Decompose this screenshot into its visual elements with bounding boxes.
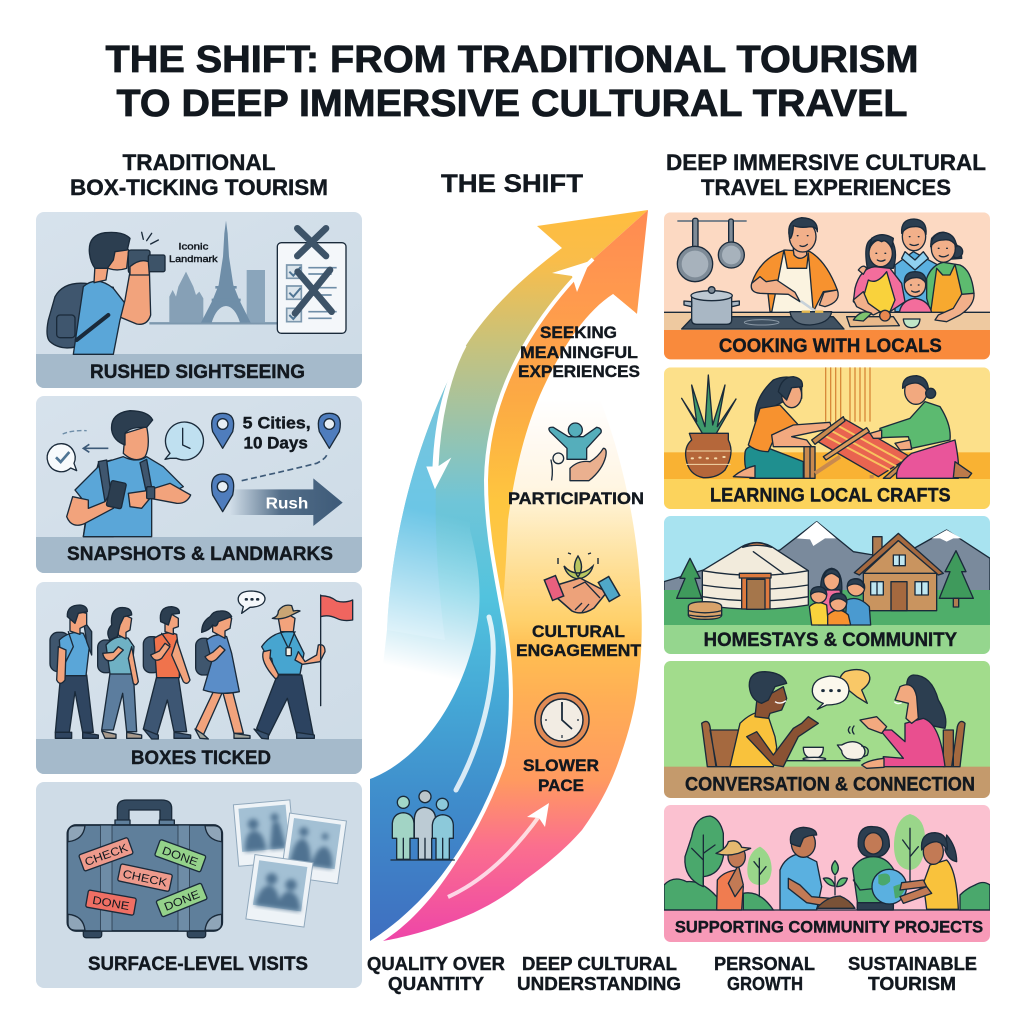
title: THE SHIFT: FROM TRADITIONAL TOURISM [106,39,918,81]
icon: clock [535,693,589,747]
arrow: inner white [456,617,493,790]
rush arrow: Rush [266,495,308,512]
family [809,568,871,625]
label: seeking: SEEKING [540,323,617,342]
label: sustainable tourism: SUSTAINABLE [848,954,977,974]
sticker: check: CHECK [121,868,168,890]
caption: CONVERSATION & CONNECTION [685,775,975,796]
sticker: check: CHECK [83,842,130,869]
ribbon: orange to pink [383,210,648,941]
location pins [212,413,340,512]
sticker: check [117,864,173,892]
icon: community group [391,791,454,860]
tourist checking watch [67,411,191,537]
label: seeking [518,323,640,381]
man planting [780,827,855,910]
stove and pot [682,287,844,329]
landmark label [169,241,218,264]
label: sustainable tourism [848,954,977,994]
man talking [730,672,818,767]
heading: deep immersive [666,150,986,200]
label: deep cultural understanding: DEEP CULTURAL [522,954,677,974]
sticker: done [86,890,136,915]
dashed route [242,453,327,481]
itinerary label: 10 Days [243,433,308,452]
label: seeking: EXPERIENCES [518,362,640,381]
cutting board and bowl [847,310,920,328]
woman with globe [853,827,894,910]
title [106,39,918,125]
itinerary label: 5 Cities, [243,413,311,432]
heading: the shift: THE SHIFT [441,170,583,198]
globe [872,869,907,904]
bottom labels [367,954,977,994]
landmark label: Landmark [169,254,218,264]
caption: SURFACE-LEVEL VISITS [88,954,308,975]
panel: surface-level visits [36,782,362,988]
speech bubbles [812,670,870,709]
house [854,533,943,611]
ribbon: blue to gold [370,210,648,941]
label: sustainable tourism: TOURISM [868,974,956,994]
tourist 3 [143,607,191,739]
sticker: done [154,839,206,872]
tint: sky blue leaf [387,347,465,640]
label: slower pace: PACE [538,776,584,795]
label: participation: PARTICIPATION [508,489,644,508]
blurred photo [281,813,346,884]
suitcase [67,800,222,938]
label: slower pace: SLOWER [523,756,599,775]
title: TO DEEP IMMERSIVE CULTURAL TRAVEL [116,83,908,125]
sticker: done [156,883,207,917]
caption: LEARNING LOCAL CRAFTS [710,486,951,507]
label: seeking: MEANINGFUL [520,343,638,362]
label: quality over quantity: QUALITY OVER [367,954,505,974]
caption: BOXES TICKED [131,748,271,769]
panel: homestays and community [664,516,990,655]
panel: learning local crafts [664,367,990,511]
caption: SUPPORTING COMMUNITY PROJECTS [675,917,983,936]
photographer [47,232,165,354]
trees [677,551,973,607]
tour guide with flag [254,595,353,739]
label: personal growth [714,954,815,994]
sticker: done: DONE [160,845,200,869]
heading: deep immersive: TRAVEL EXPERIENCES [701,175,951,200]
tourist 4 [195,611,250,739]
label: personal growth: GROWTH [727,974,803,994]
panel: supporting community projects [664,805,990,943]
loom [804,417,913,478]
sticker: done: DONE [163,888,202,914]
tourist 2 [98,608,142,738]
panel: snapshots and landmarks [36,396,362,573]
panel: conversation and connection [664,661,990,798]
icon: participation [549,423,606,481]
sticker: check [79,837,133,871]
learner [733,377,832,478]
wok [790,312,832,325]
check bubble and arrow [47,431,108,472]
blurred photo [233,800,295,866]
tourist 1 [50,605,98,738]
arrow: downward white [427,346,466,488]
caption: COOKING WITH LOCALS [719,336,942,357]
teacup and teapot [787,726,868,761]
family [853,219,974,322]
caption: HOMESTAYS & COMMUNITY [704,630,957,651]
heading: traditional: TRADITIONAL [122,150,276,175]
girl with ponytail [900,833,958,909]
farmer in hat [716,841,751,910]
arrow: upper white [552,261,590,292]
label: personal growth: PERSONAL [714,954,815,974]
sticker: done: DONE [91,895,131,913]
icon: handshake [544,553,620,613]
label: cultural engagement [516,622,642,660]
arrow: lower white [448,803,549,897]
cook [751,218,838,313]
trees [685,814,925,897]
teacher [870,376,972,478]
chart: shift arrow [366,210,655,944]
heading: traditional [70,150,328,200]
clock bubble [165,422,203,460]
itinerary label [243,413,311,452]
plant [682,375,736,478]
yurt [688,542,808,619]
skyline [149,221,278,323]
panel: cooking with locals [664,212,990,360]
woman talking [860,675,946,768]
rush arrow [230,478,343,526]
speech bubble [238,591,265,613]
heading: traditional: BOX-TICKING TOURISM [70,175,328,200]
label: quality over quantity [367,954,505,994]
landmark label: Iconic [178,241,209,251]
label: quality over quantity: QUANTITY [388,974,484,994]
label: deep cultural understanding [517,954,681,994]
white divider [372,259,593,944]
fade: blue ribbon [366,400,480,785]
label: slower pace [523,756,599,795]
heading: deep immersive: DEEP IMMERSIVE CULTURAL [666,150,986,175]
checklist with crosses [277,228,346,333]
panel: boxes ticked [36,582,362,774]
label: deep cultural understanding: UNDERSTANDING [517,974,681,994]
label: cultural engagement: ENGAGEMENT [516,641,642,660]
fade: orange ribbon [500,280,655,650]
hanging pans [677,218,747,282]
caption: SNAPSHOTS & LANDMARKS [67,544,333,565]
blurred photo [246,855,313,927]
chairs [702,721,965,767]
panel: rushed sightseeing [36,212,362,388]
warp threads [826,367,870,422]
caption: RUSHED SIGHTSEEING [90,362,305,383]
label: cultural engagement: CULTURAL [532,622,625,641]
